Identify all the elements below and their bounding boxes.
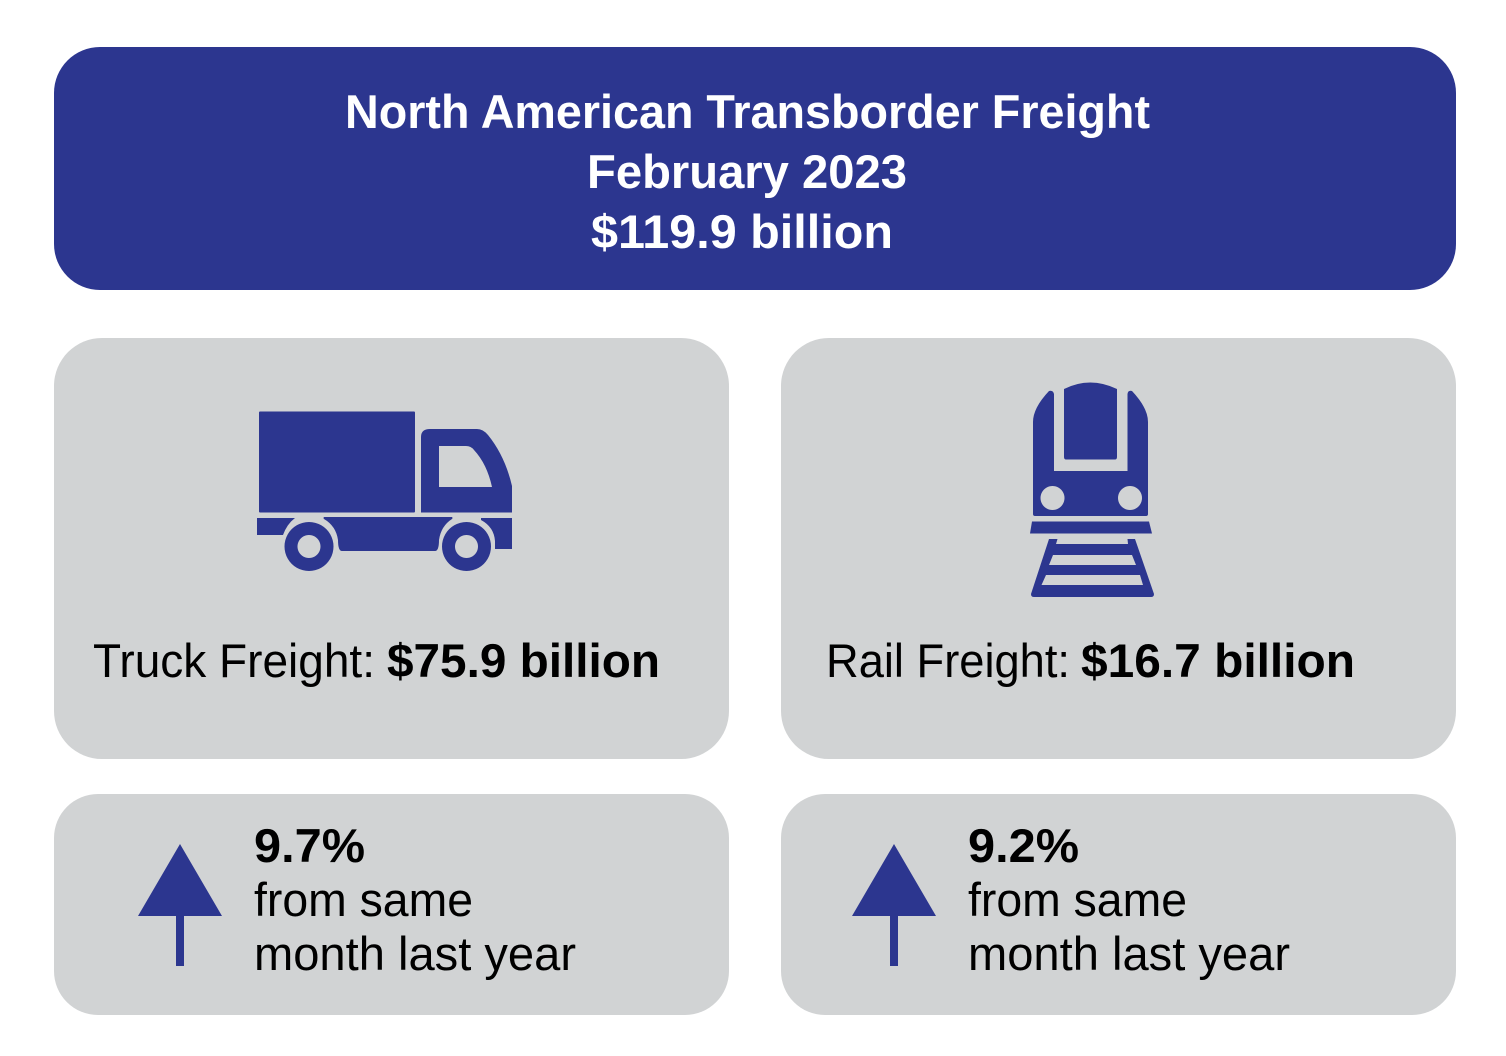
truck change text: month last year: [254, 927, 576, 980]
icon: train: [1030, 382, 1154, 597]
panel: rail change: [781, 794, 1456, 1015]
rail change text: month last year: [968, 927, 1290, 980]
panel: truck freight: [54, 338, 729, 759]
truck change text: from same: [254, 873, 473, 926]
rail change text: 9.2%: [968, 819, 1079, 872]
rail freight label: [826, 634, 1355, 687]
rail freight label: $16.7 billion: [1081, 634, 1355, 687]
icon: up arrow: [138, 844, 222, 966]
truck freight label: [93, 634, 660, 687]
panel: title banner: [54, 47, 1456, 290]
icon: truck: [257, 412, 512, 571]
panel: rail freight: [781, 338, 1456, 759]
rail freight label: Rail Freight:: [826, 634, 1070, 687]
truck freight label: Truck Freight:: [93, 634, 375, 687]
title heading: [345, 85, 1150, 258]
truck change text: [254, 819, 576, 980]
panel: truck change: [54, 794, 729, 1015]
icon: up arrow: [852, 844, 936, 966]
rail change text: [968, 819, 1290, 980]
rail change text: from same: [968, 873, 1187, 926]
truck freight label: $75.9 billion: [387, 634, 660, 687]
title heading: $119.9 billion: [591, 205, 893, 258]
title heading: February 2023: [587, 145, 907, 198]
title heading: North American Transborder Freight: [345, 85, 1150, 138]
truck change text: 9.7%: [254, 819, 365, 872]
